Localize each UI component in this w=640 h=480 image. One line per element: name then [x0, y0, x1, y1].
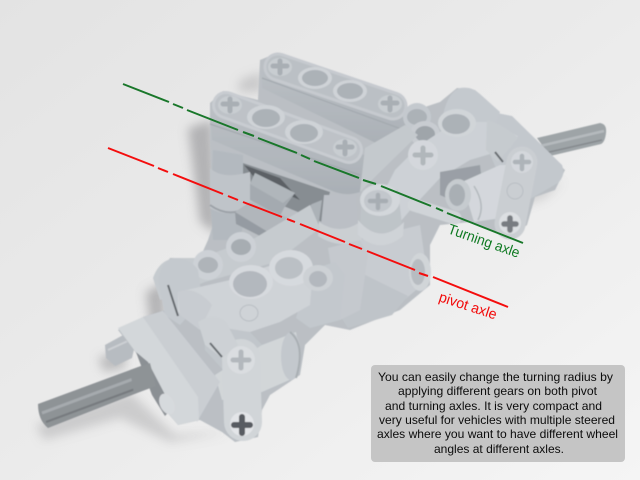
right axle	[537, 123, 606, 156]
central body	[360, 225, 428, 312]
lower left hub	[215, 332, 301, 400]
left axle front section	[130, 363, 156, 394]
text box: description: very useful for vehicles with multiple steered	[379, 413, 615, 427]
middle lift arm	[153, 205, 320, 300]
second beam: rear top beam	[262, 58, 408, 147]
model: steering assembly	[38, 53, 606, 442]
turning axle line (green, dashed)	[123, 84, 523, 243]
top right loop connector	[443, 88, 500, 132]
lower left loop connector	[158, 258, 202, 325]
text box: description: axles where you want to have different wheel	[377, 427, 618, 441]
lower steering link	[198, 317, 255, 436]
pivot axle line (red, dashed)	[108, 148, 508, 307]
plate beside front beam	[360, 125, 418, 192]
text box: description: You can easily change the turning radius by	[378, 370, 613, 384]
right rear pin with hub	[440, 165, 522, 222]
right bracket	[480, 113, 563, 199]
middle arm rings	[193, 232, 256, 280]
thin light axle	[414, 205, 455, 218]
front top beam	[210, 96, 365, 194]
left axle	[38, 363, 155, 428]
axle stub	[105, 334, 135, 366]
shadows under the model	[36, 72, 562, 442]
text box: description: applying different gears on both pivot	[398, 384, 598, 398]
lower lift arm	[178, 250, 345, 372]
label: Turning axle: Turning axle	[446, 222, 522, 262]
wedge blocks	[235, 173, 322, 258]
model silhouette base	[118, 53, 565, 442]
gap under front beam	[240, 162, 330, 222]
text box: description: and turning axles. It is very compact and	[385, 399, 602, 413]
text box: description: angles at different axles.	[434, 442, 564, 456]
right steering link	[499, 151, 533, 234]
lower left plate	[118, 311, 220, 425]
label: pivot axle: pivot axle	[437, 290, 499, 323]
text box: description	[371, 365, 625, 462]
front columns	[318, 184, 404, 320]
left columns	[210, 150, 252, 240]
right side rings	[403, 103, 440, 147]
upper right curved arm	[372, 109, 518, 228]
